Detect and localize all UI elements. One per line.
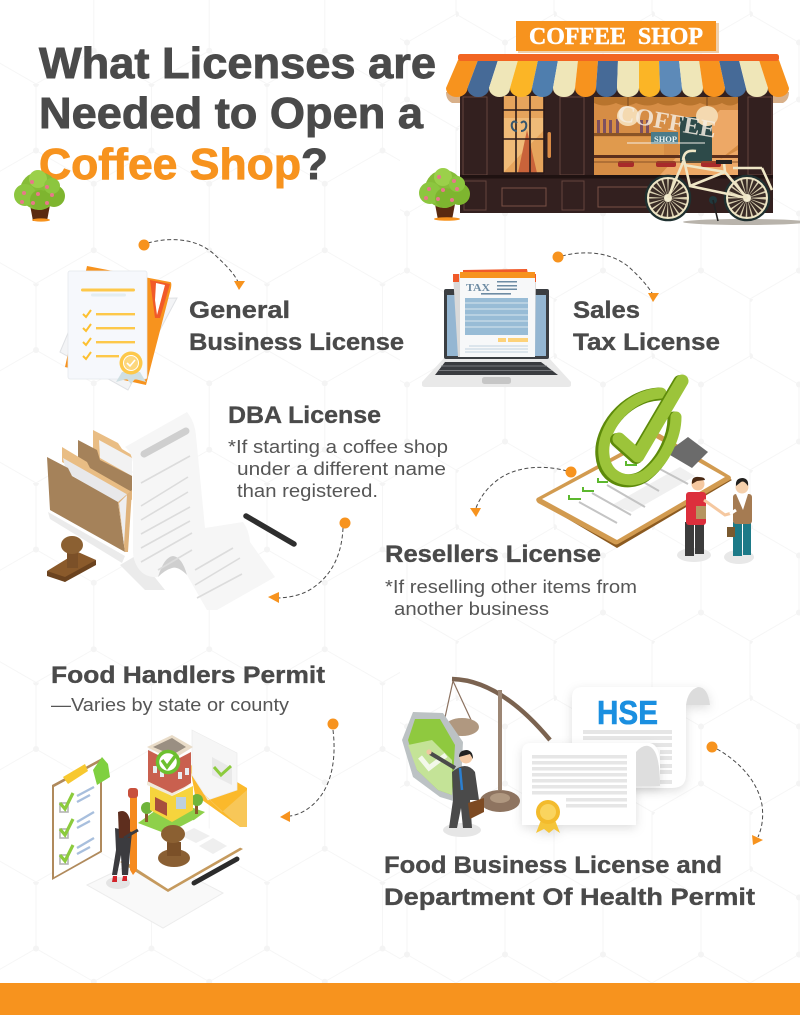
balance scale (444, 679, 550, 812)
envelope with letter (190, 730, 247, 827)
clip (670, 437, 708, 468)
heading and note: DBA license (228, 402, 448, 501)
heading and note: resellers license: Resellers License (385, 541, 601, 568)
businessman (426, 749, 484, 837)
man in brown vest (724, 478, 754, 564)
scroll paper (125, 412, 275, 610)
heading and note: DBA license: DBA License (228, 402, 381, 429)
back HSE document (572, 687, 710, 788)
arrow: general business license (138, 240, 245, 290)
stamp (47, 536, 96, 582)
front certificate (522, 743, 660, 833)
back HSE document: HSE (597, 694, 658, 731)
arrow: resellers license (470, 466, 576, 517)
heading and note: food handlers permit: —Varies by state or county (51, 694, 290, 715)
heading: sales tax license: Tax License (573, 329, 720, 356)
title: ? (301, 140, 328, 189)
shield (402, 712, 463, 803)
icon: bicycle (646, 151, 772, 221)
heading and note: resellers license: *If reselling other items from (385, 576, 637, 597)
icon: laptop with tax form: TAX (466, 282, 490, 294)
heading and note: food handlers permit: Food Handlers Permit (51, 662, 325, 689)
pen (194, 859, 237, 883)
shop building (460, 88, 773, 213)
heading: general business license (189, 297, 404, 356)
icon: green check ring (602, 381, 682, 481)
shop sign: COFFEE SHOP (529, 24, 703, 50)
icon: plant at shop (419, 168, 470, 221)
heading: food business license and health permit (384, 852, 755, 911)
heading: food business license and health permit: Department Of Health Permit (384, 884, 755, 911)
illustration: clipboard with check and two people (536, 381, 754, 564)
heading: general business license: General (189, 297, 290, 324)
back papers (87, 855, 223, 928)
illustration: HSE documents, scale and businessman (402, 679, 710, 837)
illustration: folders, scroll and stamp (47, 412, 294, 610)
title (39, 39, 436, 189)
icon: laptop with tax form (422, 269, 571, 387)
heading and note: food handlers permit (51, 662, 325, 715)
heading and note: resellers license: another business (394, 598, 549, 619)
shop window: SHOP (654, 134, 677, 144)
pen (246, 516, 294, 544)
heading and note: DBA license: under a different name (237, 458, 446, 479)
lawn and trees (138, 794, 205, 836)
arrow: sales tax license (552, 252, 659, 302)
shop sign (516, 21, 719, 53)
shop window (594, 97, 738, 175)
title: What Licenses are (39, 39, 436, 88)
heading and note: resellers license (385, 541, 637, 619)
illustration: food handlers permit scene (52, 730, 247, 928)
arrow: food business license (706, 742, 763, 845)
clipboard (536, 434, 732, 548)
heading: sales tax license (573, 297, 720, 356)
awning (446, 54, 789, 103)
arrow: food handlers permit (280, 718, 338, 822)
title: Coffee Shop (39, 140, 301, 189)
heading and note: DBA license: *If starting a coffee shop (228, 436, 448, 457)
heading and note: DBA license: than registered. (237, 480, 378, 501)
heading: general business license: Business License (189, 329, 404, 356)
clipboard checklist (52, 757, 110, 880)
heading: food business license and health permit: Food Business License and (384, 852, 722, 879)
small building (147, 735, 193, 822)
bottom bar (0, 983, 800, 1015)
icon: general business license documents (60, 266, 177, 390)
heading: sales tax license: Sales (573, 297, 640, 324)
woman with pencil (106, 788, 138, 889)
icon: plant left (14, 170, 65, 222)
man in red shirt (677, 477, 732, 562)
arrow: DBA license (268, 518, 350, 603)
illustration: coffee shop storefront (446, 21, 800, 225)
shop window: COFFEE (615, 101, 718, 144)
folders (47, 430, 132, 552)
title: Needed to Open a (39, 89, 424, 138)
document and stamp (120, 820, 243, 892)
